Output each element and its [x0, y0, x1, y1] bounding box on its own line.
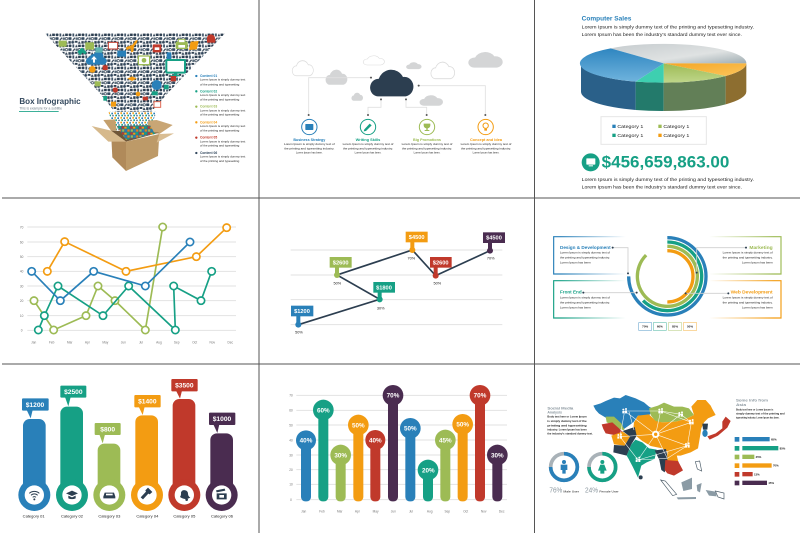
- concept and idea: Concept and Idea: [470, 138, 503, 142]
- milestone 2: $2600: [333, 260, 349, 266]
- social media text: [547, 405, 593, 435]
- milestone 3: $1800: [376, 285, 392, 291]
- axis labels: Feb: [49, 340, 55, 344]
- content list: Lorem Ipsum is simply dummy text: [200, 78, 246, 82]
- box: web development: Lorem Ipsum is simply dummy text of: [723, 296, 773, 300]
- concept and idea: Lorem Ipsum has been.: [473, 151, 500, 155]
- concept and idea: the printing and typesetting industry.: [461, 146, 511, 150]
- box: front end: Front End: [560, 290, 582, 295]
- content list: Lorem Ipsum is simply dummy text: [200, 93, 246, 97]
- info text: simply dummy text of the printing and: [736, 412, 785, 416]
- panel: category thermometers: [18, 379, 238, 518]
- category 02: Category 02: [61, 514, 83, 518]
- panel: cloud diagram: [284, 52, 512, 155]
- bars: 50%: [456, 422, 469, 429]
- axis labels: Apr: [85, 340, 90, 344]
- big promotions: [402, 119, 453, 155]
- bars: 20%: [422, 467, 435, 474]
- axis labels: 70: [20, 225, 24, 229]
- trend line: [298, 250, 490, 325]
- axis labels: 20: [20, 299, 24, 303]
- milestone 4: 70%: [407, 256, 416, 260]
- axis labels: Nov: [210, 340, 216, 344]
- bars: 40%: [369, 437, 382, 444]
- milestone 6: 70%: [487, 257, 495, 261]
- female donut: Female User: [599, 489, 619, 493]
- background clouds: [292, 52, 503, 106]
- panel: lollipop bar chart: [289, 385, 508, 513]
- milestone 1: [291, 306, 313, 334]
- box: web development: the printing and typesetting industry.: [723, 300, 773, 304]
- social bars: [735, 437, 786, 485]
- social bars: 65%: [771, 437, 777, 441]
- connectors: [582, 247, 747, 294]
- panel: line chart: [20, 223, 236, 344]
- axis labels: 20: [289, 468, 293, 472]
- male donut: [549, 454, 579, 495]
- box: web development: Web Development: [731, 289, 773, 294]
- title: This is example for a subtitle: [19, 107, 62, 111]
- bars: 50%: [352, 422, 365, 429]
- percent legend: [639, 323, 697, 330]
- description: Lorem Ipsum is simply dummy text of the printing and typesetting industry.: [582, 177, 754, 183]
- bars: 60%: [317, 407, 330, 414]
- category 05: Category 05: [173, 514, 196, 518]
- box: marketing: Lorem Ipsum is simply dummy text of: [723, 251, 773, 255]
- social bars: 13%: [754, 472, 760, 476]
- bars: 30%: [334, 452, 347, 459]
- milestone 4: $4500: [409, 235, 425, 241]
- radial chart: [629, 238, 706, 315]
- content list: Content 04: [200, 120, 217, 124]
- axis labels: Mar: [337, 509, 342, 513]
- network lines: [617, 408, 694, 462]
- percent legend: 50%: [687, 325, 693, 329]
- bars: 50%: [404, 426, 417, 433]
- axis labels: 0: [290, 498, 292, 502]
- axis labels: 10: [20, 314, 24, 318]
- info text: typesetting industry. Lorem Ipsum has been.: [736, 416, 780, 420]
- axis labels: 10: [289, 483, 293, 487]
- big promotions: the printing and typesetting industry.: [402, 146, 452, 150]
- axis labels: May: [102, 340, 109, 344]
- male donut: Male User: [563, 489, 579, 493]
- social bars: 85%: [780, 446, 786, 450]
- axis labels: Jun: [391, 509, 396, 513]
- social bars: 70%: [773, 464, 779, 468]
- content list: of the printing and typesetting: [200, 159, 240, 163]
- axis labels: 40: [289, 438, 293, 442]
- content list: Content 02: [200, 89, 217, 93]
- category 04: Category 04: [136, 514, 159, 518]
- axis labels: May: [373, 509, 379, 513]
- category 04: $1400: [138, 398, 157, 405]
- axis labels: Aug: [427, 509, 433, 513]
- box: marketing: [709, 237, 781, 274]
- axis labels: Jun: [121, 340, 126, 344]
- content list: of the printing and typesetting: [200, 128, 240, 132]
- female donut: 24%: [585, 488, 598, 495]
- social media text: Analysis: [547, 410, 563, 415]
- series: orange: [44, 224, 230, 275]
- social bars: 45%: [768, 481, 774, 485]
- category 04: [131, 395, 163, 518]
- bars: 40%: [300, 438, 313, 445]
- legend: Category 1: [663, 133, 690, 139]
- category 03: Category 03: [98, 514, 121, 518]
- icon: monitor: [582, 153, 600, 171]
- series: light green: [30, 223, 166, 334]
- panel: computer sales: [580, 17, 754, 191]
- 3d pie chart: [580, 44, 746, 111]
- axis labels: 0: [21, 329, 23, 333]
- content list: of the printing and typesetting: [200, 113, 240, 117]
- icon: main cloud: [370, 70, 413, 96]
- box: design and development: the printing and typesetting industry.: [560, 256, 610, 260]
- heading: Lorem Ipsum has been the industry's standard dummy text ever since.: [582, 32, 742, 38]
- percent legend: 60%: [657, 325, 663, 329]
- content list: Content 06: [200, 151, 217, 155]
- social media text: printing and typesetting: [547, 423, 587, 427]
- legend: Category 1: [617, 124, 644, 130]
- heading: Computer Sales: [582, 17, 632, 23]
- axis labels: Mar: [67, 340, 72, 344]
- axis labels: Jul: [139, 340, 143, 344]
- cardboard box: [92, 119, 174, 171]
- panel: price milestones: [291, 232, 505, 334]
- title: Box Infographic: [19, 96, 81, 106]
- axis labels: [20, 225, 234, 344]
- content list: Lorem Ipsum is simply dummy text: [200, 139, 246, 143]
- category 05: $3500: [175, 382, 194, 389]
- box: design and development: Design & Development: [560, 245, 611, 250]
- legend: Category 1: [663, 124, 690, 130]
- axis labels: 40: [20, 270, 24, 274]
- category 03: [93, 423, 125, 518]
- map of asia: [593, 395, 731, 499]
- milestone 5: $2600: [433, 260, 449, 266]
- writing skills: [343, 119, 394, 155]
- panel: box infographic: [19, 33, 246, 171]
- bars: 30%: [491, 452, 504, 459]
- category 06: $1000: [213, 416, 232, 423]
- legend: Category 1: [617, 133, 644, 139]
- category 01: [18, 398, 50, 518]
- box: design and development: [554, 237, 626, 274]
- heading: Lorem Ipsum is simply dummy text of the printing and typesetting industry.: [582, 25, 754, 31]
- box: design and development: Lorem Ipsum has been: [560, 261, 591, 265]
- social media text: Social Media: [547, 405, 574, 410]
- category 06: Category 06: [211, 514, 233, 518]
- social bars: 25%: [756, 455, 762, 459]
- axis labels: 50: [289, 423, 293, 427]
- bars: 70%: [387, 393, 400, 400]
- bars: 45%: [439, 437, 452, 444]
- icon funnel: [45, 33, 225, 131]
- title: [19, 96, 81, 112]
- content list: of the printing and typesetting: [200, 97, 240, 101]
- category 01: $1200: [26, 402, 45, 409]
- milestone 5: [430, 257, 452, 286]
- axis labels: Dec: [499, 509, 505, 513]
- axis labels: Sep: [174, 340, 180, 344]
- axis labels: 60: [20, 240, 24, 244]
- business strategy: the printing and typesetting industry.: [284, 146, 335, 150]
- milestone 3: [373, 282, 395, 310]
- content list: of the printing and typesetting: [200, 82, 240, 86]
- info text: Some Info from: [736, 398, 768, 403]
- business strategy: Lorem Ipsum has been.: [296, 151, 323, 155]
- axis labels: Aug: [156, 340, 162, 344]
- info text: Asia: [736, 402, 747, 407]
- milestone 3: 30%: [377, 306, 385, 310]
- total figure: $456,659,863.00: [602, 153, 729, 172]
- milestone 2: 50%: [333, 282, 342, 286]
- connectors: [308, 77, 486, 116]
- axis labels: Oct: [463, 509, 468, 513]
- axis labels: 30: [20, 284, 24, 288]
- male donut: 76%: [549, 488, 562, 495]
- category 06: [206, 413, 238, 518]
- big promotions: Lorem Ipsum has been.: [414, 151, 441, 155]
- legend: [601, 117, 706, 144]
- bars: 70%: [474, 393, 487, 400]
- milestone 1: $1200: [294, 309, 310, 315]
- axis labels: Jan: [31, 340, 36, 344]
- series: teal: [35, 268, 215, 334]
- description: [582, 177, 754, 191]
- axis labels: 50: [20, 255, 24, 259]
- category 01: Category 01: [23, 514, 45, 518]
- business strategy: Lorem Ipsum is simply dummy text of: [284, 142, 335, 146]
- box: front end: the printing and typesetting industry.: [560, 300, 610, 304]
- social media text: Body text here or Lorem Ipsum: [547, 415, 587, 419]
- box: marketing: Lorem Ipsum has been: [742, 261, 773, 265]
- category 03: $800: [100, 426, 115, 433]
- social media text: the industry's standard dummy text.: [547, 431, 593, 435]
- info text: Body text here or Lorem Ipsum is: [736, 408, 774, 412]
- milestone 5: 50%: [433, 282, 442, 286]
- box: web development: [709, 281, 781, 318]
- content list: of the printing and typesetting: [200, 144, 240, 148]
- big promotions: Lorem Ipsum is simply dummy text of: [402, 142, 453, 146]
- axis labels: Oct: [192, 340, 197, 344]
- milestone 1: 50%: [295, 330, 303, 334]
- milestone 6: [483, 232, 505, 261]
- axis labels: 30: [289, 453, 293, 457]
- content list: Content 01: [200, 74, 217, 78]
- big promotions: Big Promotions: [413, 138, 441, 142]
- axis labels: Feb: [319, 509, 325, 513]
- box: front end: Lorem Ipsum is simply dummy text of: [560, 296, 610, 300]
- milestone 6: $4500: [486, 236, 502, 242]
- writing skills: Writing Skills: [356, 138, 380, 142]
- panel: radial progress: [554, 237, 781, 330]
- category 02: $2500: [64, 389, 83, 396]
- social media text: industry. Lorem Ipsum has been: [547, 427, 587, 431]
- box: marketing: Marketing: [749, 245, 773, 250]
- percent legend: 70%: [642, 325, 648, 329]
- content list: Lorem Ipsum is simply dummy text: [200, 108, 246, 112]
- content list: Lorem Ipsum is simply dummy text: [200, 155, 246, 159]
- box: web development: Lorem Ipsum has been: [742, 305, 773, 309]
- milestone 4: [406, 232, 428, 260]
- writing skills: Lorem Ipsum has been.: [355, 151, 382, 155]
- milestone 2: [330, 257, 352, 286]
- axis labels: Apr: [355, 509, 360, 513]
- concept and idea: [461, 119, 512, 155]
- axis labels: 60: [289, 409, 293, 413]
- axis labels: Jul: [409, 509, 413, 513]
- content list: Lorem Ipsum is simply dummy text: [200, 124, 246, 128]
- box: front end: [554, 281, 626, 318]
- axis labels: Jan: [301, 509, 306, 513]
- writing skills: the printing and typesetting industry.: [343, 146, 393, 150]
- description: Lorem Ipsum has been the industry's standard dummy text ever since.: [582, 185, 742, 191]
- axis labels: [289, 394, 505, 513]
- box: marketing: the printing and typesetting industry.: [723, 256, 773, 260]
- heading: [582, 17, 754, 38]
- axis labels: Nov: [481, 509, 487, 513]
- female donut: [585, 454, 619, 495]
- panel: asia social media: [547, 395, 786, 499]
- info text: [736, 398, 785, 420]
- social media text: is simply dummy text of the: [547, 419, 587, 423]
- category 05: [168, 379, 200, 518]
- concept and idea: Lorem Ipsum is simply dummy text of: [461, 142, 512, 146]
- writing skills: Lorem Ipsum is simply dummy text of: [343, 142, 394, 146]
- box: front end: Lorem Ipsum has been: [560, 305, 591, 309]
- series: blue: [28, 238, 194, 304]
- axis labels: Sep: [445, 509, 450, 513]
- business strategy: [284, 119, 335, 155]
- axis labels: 70: [289, 394, 293, 398]
- business strategy: Business Strategy: [293, 138, 326, 142]
- category 02: [56, 386, 88, 518]
- content list: [195, 74, 246, 163]
- content list: Content 05: [200, 136, 217, 140]
- content list: Content 03: [200, 105, 217, 109]
- bars: [296, 385, 508, 501]
- percent legend: 85%: [672, 325, 678, 329]
- box: design and development: Lorem Ipsum is simply dummy text of: [560, 251, 610, 255]
- axis labels: Dec: [228, 340, 234, 344]
